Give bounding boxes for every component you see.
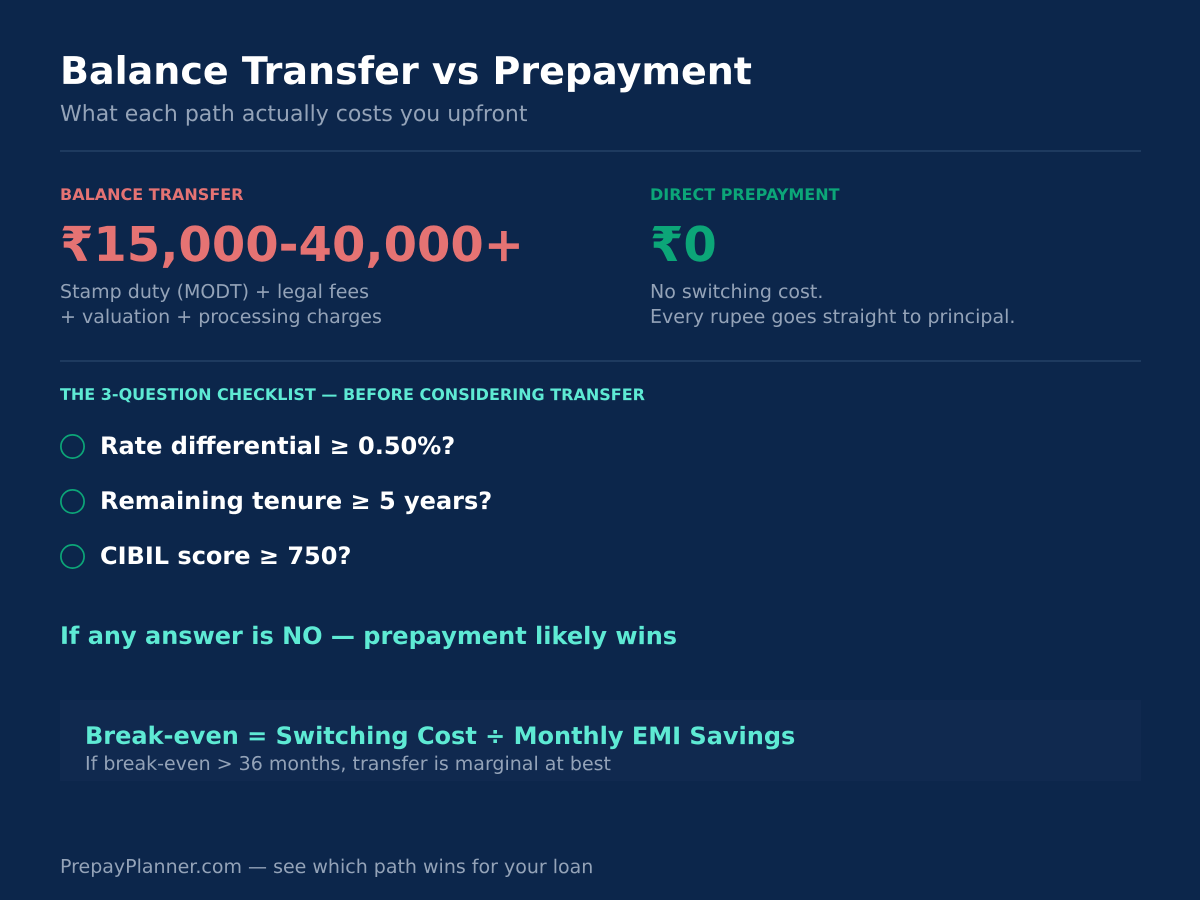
text: balance transfer cost breakdown: Stamp duty (MODT) + legal fees (60, 281, 369, 303)
footer: PrepayPlanner.com — see which path wins for your loan (60, 856, 593, 878)
text: balance transfer cost breakdown (60, 281, 382, 328)
item: rate differential: Rate differential ≥ 0.50%? (100, 432, 455, 460)
formula: Break-even = Switching Cost ÷ Monthly EMI Savings (85, 722, 795, 750)
callout: verdict: If any answer is NO — prepayment likely wins (60, 622, 677, 650)
item: remaining tenure: Remaining tenure ≥ 5 years? (100, 487, 492, 515)
subtitle: What each path actually costs you upfront (60, 102, 527, 127)
panel: break-even formula (60, 700, 1141, 781)
text: direct prepayment explanation: No switching cost. (650, 281, 823, 303)
cost: balance transfer amount: ₹15,000-40,000+ (60, 217, 524, 273)
title: Balance Transfer vs Prepayment (60, 49, 752, 93)
cost: direct prepayment amount: ₹0 (650, 217, 717, 273)
text: direct prepayment explanation: Every rupee goes straight to principal. (650, 306, 1015, 328)
panel: direct prepayment cost (650, 185, 1015, 328)
text: balance transfer cost breakdown: + valuation + processing charges (60, 306, 382, 328)
formula note: If break-even > 36 months, transfer is marginal at best (85, 753, 611, 775)
label: direct prepayment: DIRECT PREPAYMENT (650, 185, 840, 204)
heading: checklist: THE 3-QUESTION CHECKLIST — BEFORE CONSIDERING TRANSFER (60, 385, 645, 404)
label: balance transfer: BALANCE TRANSFER (60, 185, 244, 204)
text: direct prepayment explanation (650, 281, 1015, 328)
checklist (60, 432, 492, 570)
item: CIBIL score: CIBIL score ≥ 750? (100, 542, 351, 570)
panel: balance transfer cost (60, 185, 524, 328)
